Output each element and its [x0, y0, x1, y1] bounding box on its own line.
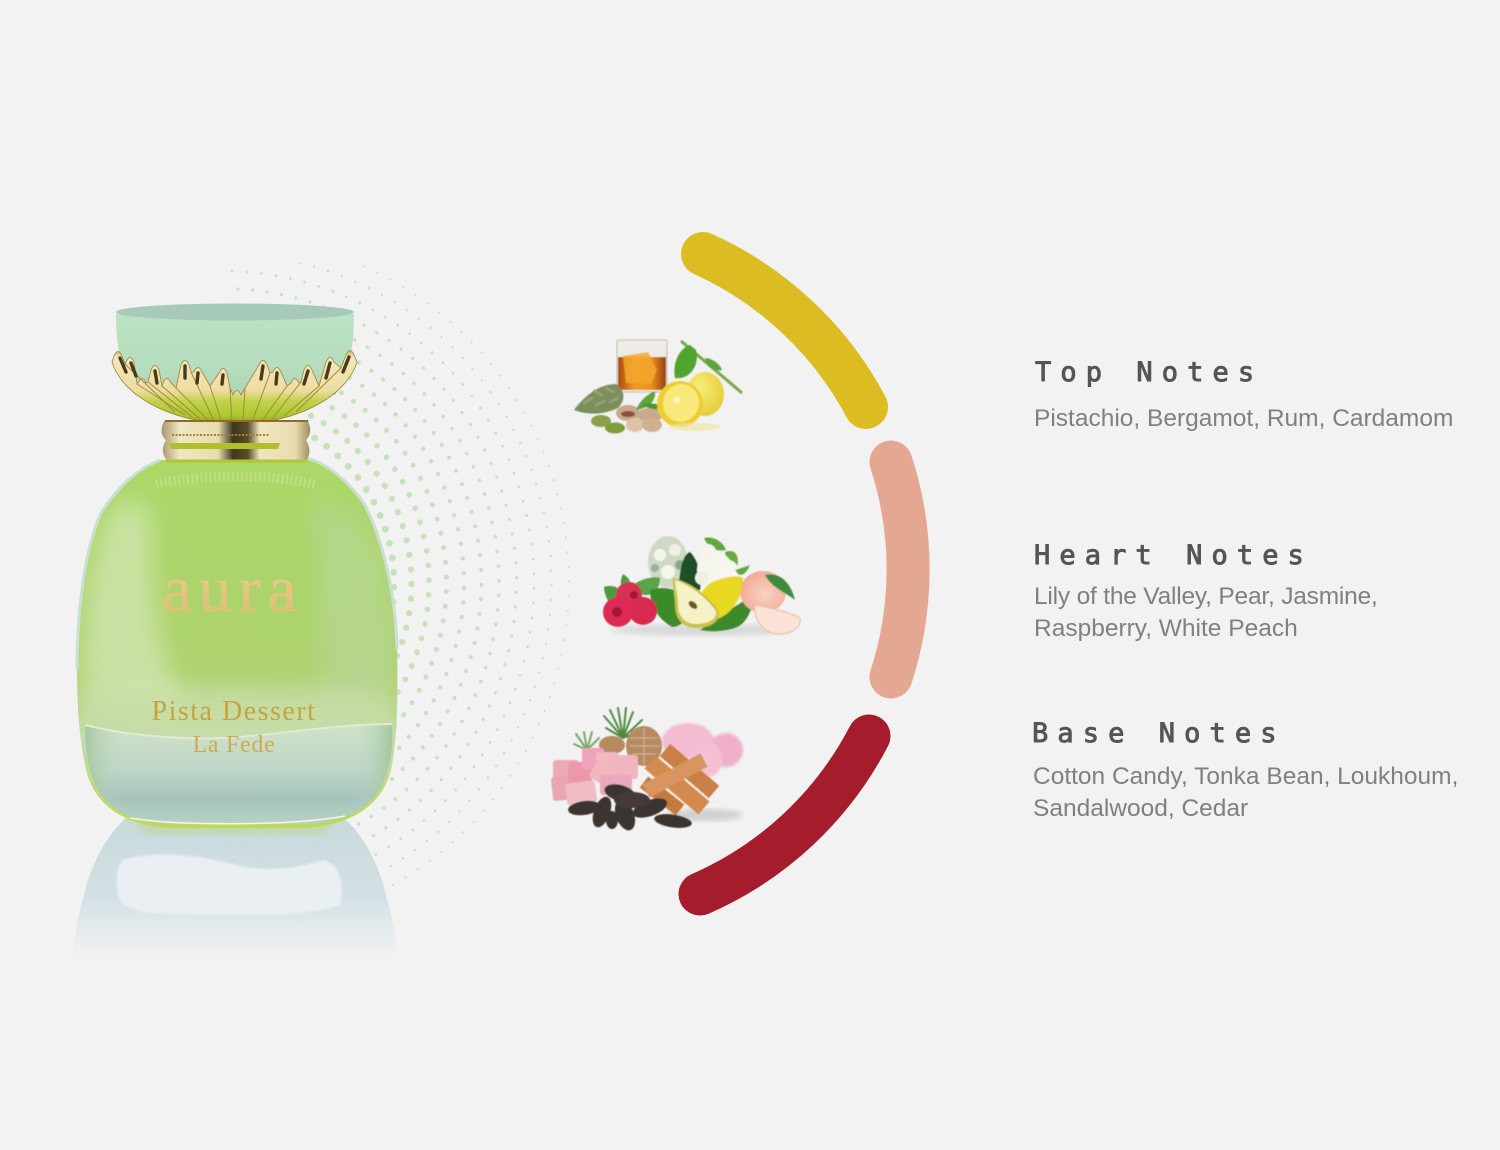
bottle reflection — [72, 815, 398, 968]
lemon shadow — [669, 423, 721, 431]
cardamom pile — [574, 384, 625, 434]
brand label: aura: aura — [162, 553, 304, 626]
text: base notes list: Sandalwood, Cedar — [1033, 795, 1248, 822]
ingredients: heart notes — [603, 536, 800, 636]
raspberry leaves — [604, 574, 660, 604]
yellow pear — [701, 576, 743, 618]
dark leaves — [678, 552, 701, 590]
pine cones — [599, 726, 662, 766]
gold collar — [162, 421, 310, 461]
sandalwood sticks — [644, 750, 714, 810]
cut pear — [673, 578, 719, 628]
ground shadow — [667, 809, 743, 821]
peach slice — [755, 605, 800, 634]
peach leaf — [765, 574, 795, 600]
text: base notes list — [1033, 763, 1458, 822]
arc: top notes yellow — [703, 254, 866, 407]
green leaves — [650, 588, 755, 631]
gold petal crown — [112, 350, 357, 424]
heading: heart notes: Heart Notes — [1034, 540, 1313, 571]
ground shadow — [610, 624, 790, 636]
bottle base liquid — [85, 724, 392, 824]
pine sprigs — [574, 708, 644, 750]
heading: base notes: Base Notes — [1032, 718, 1286, 749]
ingredients: top notes — [574, 340, 742, 434]
raspberries — [603, 582, 657, 627]
pistachios — [616, 391, 666, 432]
tonka beans — [567, 781, 693, 833]
house name: La Fede — [193, 732, 275, 758]
bottle body — [77, 458, 397, 828]
rum glass — [617, 340, 667, 392]
bottle cap — [116, 304, 354, 395]
half lemon — [651, 375, 709, 433]
arc: heart notes pink — [891, 462, 908, 677]
cotton candy — [662, 723, 743, 777]
text: top notes list: Pistachio, Bergamot, Rum, Cardamom — [1034, 405, 1453, 432]
text: heart notes list — [1034, 583, 1378, 642]
text: heart notes list: Lily of the Valley, Pear, Jasmine, — [1034, 583, 1378, 610]
product name: Pista Dessert — [152, 696, 316, 727]
lily of the valley — [648, 536, 688, 588]
green leaf and stem — [674, 341, 742, 393]
whole lemon — [686, 372, 724, 416]
turkish delight — [551, 748, 638, 806]
perfume bottle — [77, 304, 397, 828]
peach — [740, 571, 786, 613]
halftone dot pattern — [230, 263, 570, 928]
text: base notes list: Cotton Candy, Tonka Bean, Loukhoum, — [1033, 763, 1458, 790]
heading: top notes: Top Notes — [1035, 357, 1263, 388]
text: heart notes list: Raspberry, White Peach — [1034, 615, 1298, 642]
ingredients: base notes — [551, 708, 743, 833]
white jasmine — [695, 538, 750, 588]
arc: base notes red — [700, 736, 869, 894]
